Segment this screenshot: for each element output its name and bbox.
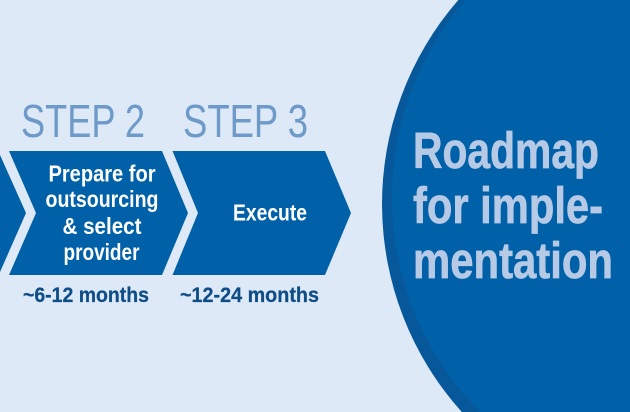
text: step 2 description: Prepare for — [48, 160, 156, 186]
text: step 3 duration: ~12-24 months — [180, 284, 319, 307]
arrow: step 1 chevron — [0, 155, 26, 272]
text: step 2 description: provider — [64, 239, 140, 265]
heading: step 2: STEP 2 — [21, 95, 145, 147]
text: step 2 duration: ~6-12 months — [23, 284, 149, 307]
heading: step 3: STEP 3 — [183, 95, 308, 147]
arrow: step 2 chevron — [9, 151, 188, 275]
text: step 2 description — [46, 160, 158, 265]
arrow: step 3 chevron — [172, 151, 351, 275]
text: step 2 description: & select — [62, 213, 142, 239]
panel: roadmap circle — [382, 0, 630, 412]
heading: roadmap for implementation — [413, 122, 613, 289]
text: step 3 description: Execute — [233, 200, 307, 226]
text: step 2 description: outsourcing — [46, 186, 158, 212]
